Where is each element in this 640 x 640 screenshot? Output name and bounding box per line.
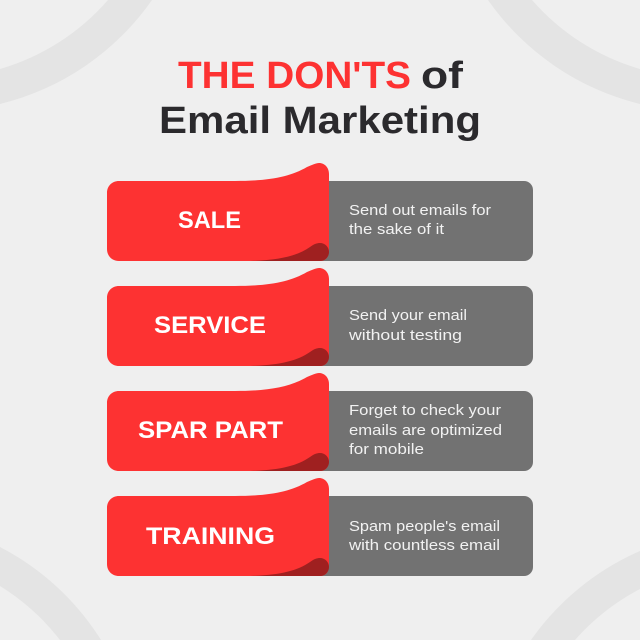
- description: [349, 403, 502, 458]
- title line 2: Email Marketing: [159, 100, 481, 142]
- description: for mobile: [349, 442, 424, 458]
- grey panel: [170, 496, 533, 576]
- ribbon fold: [250, 453, 329, 471]
- title: [159, 55, 481, 142]
- description: Spam people's email: [349, 519, 500, 535]
- description: the sake of it: [349, 222, 444, 238]
- row 4: TRAINING: [107, 478, 533, 576]
- ribbon fold: [250, 243, 329, 261]
- red ribbon: [107, 268, 329, 366]
- grey panel: [170, 181, 533, 261]
- ribbon fold: [250, 348, 329, 366]
- description: Send your email: [349, 308, 467, 324]
- description: with countless email: [348, 538, 500, 554]
- label: TRAINING: [146, 523, 275, 550]
- row 3: SPAR PART: [107, 373, 533, 471]
- row 1: SALE: [107, 163, 533, 261]
- red ribbon: [107, 373, 329, 471]
- description: Forget to check your: [349, 403, 501, 419]
- red ribbon: [107, 478, 329, 576]
- grey panel: [170, 391, 533, 471]
- title red part: THE DON'TS: [178, 55, 411, 97]
- description: [349, 203, 491, 238]
- description: emails are optimized: [349, 423, 502, 439]
- row 2: SERVICE: [107, 268, 533, 366]
- description: [348, 308, 467, 344]
- red ribbon: [107, 163, 329, 261]
- description: [348, 519, 500, 554]
- label: SERVICE: [154, 312, 266, 339]
- label: SPAR PART: [138, 417, 283, 444]
- label: SALE: [178, 207, 241, 234]
- title word of: of: [421, 55, 463, 97]
- description: without testing: [348, 328, 462, 344]
- grey panel: [170, 286, 533, 366]
- description: Send out emails for: [349, 203, 491, 219]
- ribbon fold: [250, 558, 329, 576]
